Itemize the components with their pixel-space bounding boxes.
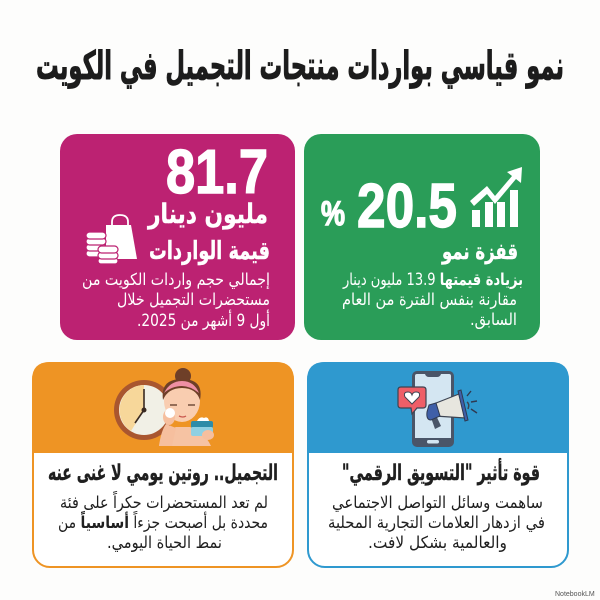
icon: phone bbox=[412, 371, 454, 447]
text: marketing description: ساهمت وسائل التواصل الاجتماعي bbox=[332, 493, 543, 513]
icon: megaphone bbox=[427, 390, 477, 429]
icon: shopping bag and coins bbox=[86, 215, 137, 264]
text: routine description bbox=[58, 490, 268, 553]
text: import description bbox=[82, 270, 270, 331]
text: marketing description: والعالمية بشكل لافت. bbox=[368, 533, 507, 553]
heading: growth jump: قفزة نمو bbox=[441, 240, 518, 265]
heading: daily routine: التجميل.. روتين يومي لا غنى عنه bbox=[48, 461, 278, 486]
panel: digital marketing bbox=[307, 362, 569, 567]
stat: 20.5 percent bbox=[321, 172, 457, 241]
stat: 20.5 percent: % bbox=[321, 195, 345, 233]
heading: import value: قيمة الواردات bbox=[149, 236, 270, 266]
text: import description: أول 9 أشهر من 2025. bbox=[137, 309, 270, 331]
stat: 81.7: 81.7 bbox=[166, 138, 268, 207]
text: import description: إجمالي حجم واردات الكويت من bbox=[82, 270, 270, 290]
icon: heart bubble bbox=[398, 387, 426, 414]
text: growth description: مقارنة بنفس الفترة من العام bbox=[342, 290, 517, 310]
panel: growth jump bbox=[304, 134, 540, 340]
icon: cream jar bbox=[191, 417, 214, 440]
text: growth description bbox=[342, 270, 523, 329]
illustration: clock and woman applying cream bbox=[114, 368, 214, 446]
text: growth description: بزيادة قيمتها 13.9 مليون دينار bbox=[342, 270, 523, 290]
panel: import value bbox=[60, 134, 295, 340]
icon: rising bar chart with arrow bbox=[470, 167, 522, 227]
icon: clock bbox=[114, 380, 174, 440]
text: import description: مستحضرات التجميل خلال bbox=[117, 290, 270, 310]
watermark: NotebookLM: NotebookLM bbox=[555, 591, 595, 598]
text: marketing description: في ازدهار العلامات التجارية المحلية bbox=[328, 513, 545, 533]
icon: woman bbox=[159, 368, 211, 446]
illustration: phone with megaphone and heart bbox=[398, 371, 477, 447]
text: routine description: نمط الحياة اليومي. bbox=[107, 533, 222, 553]
text: growth description: السابق. bbox=[470, 310, 517, 329]
text: routine description: لم تعد المستحضرات حكراً على فئة bbox=[60, 490, 268, 513]
text: routine description: محددة بل أصبحت جزءاً أساسياً من bbox=[58, 510, 268, 533]
text: marketing description bbox=[328, 493, 545, 553]
stat unit: million dinars: مليون دينار bbox=[146, 199, 268, 230]
panel: daily routine bbox=[32, 362, 294, 567]
stat: 20.5 percent: 20.5 bbox=[357, 172, 457, 241]
